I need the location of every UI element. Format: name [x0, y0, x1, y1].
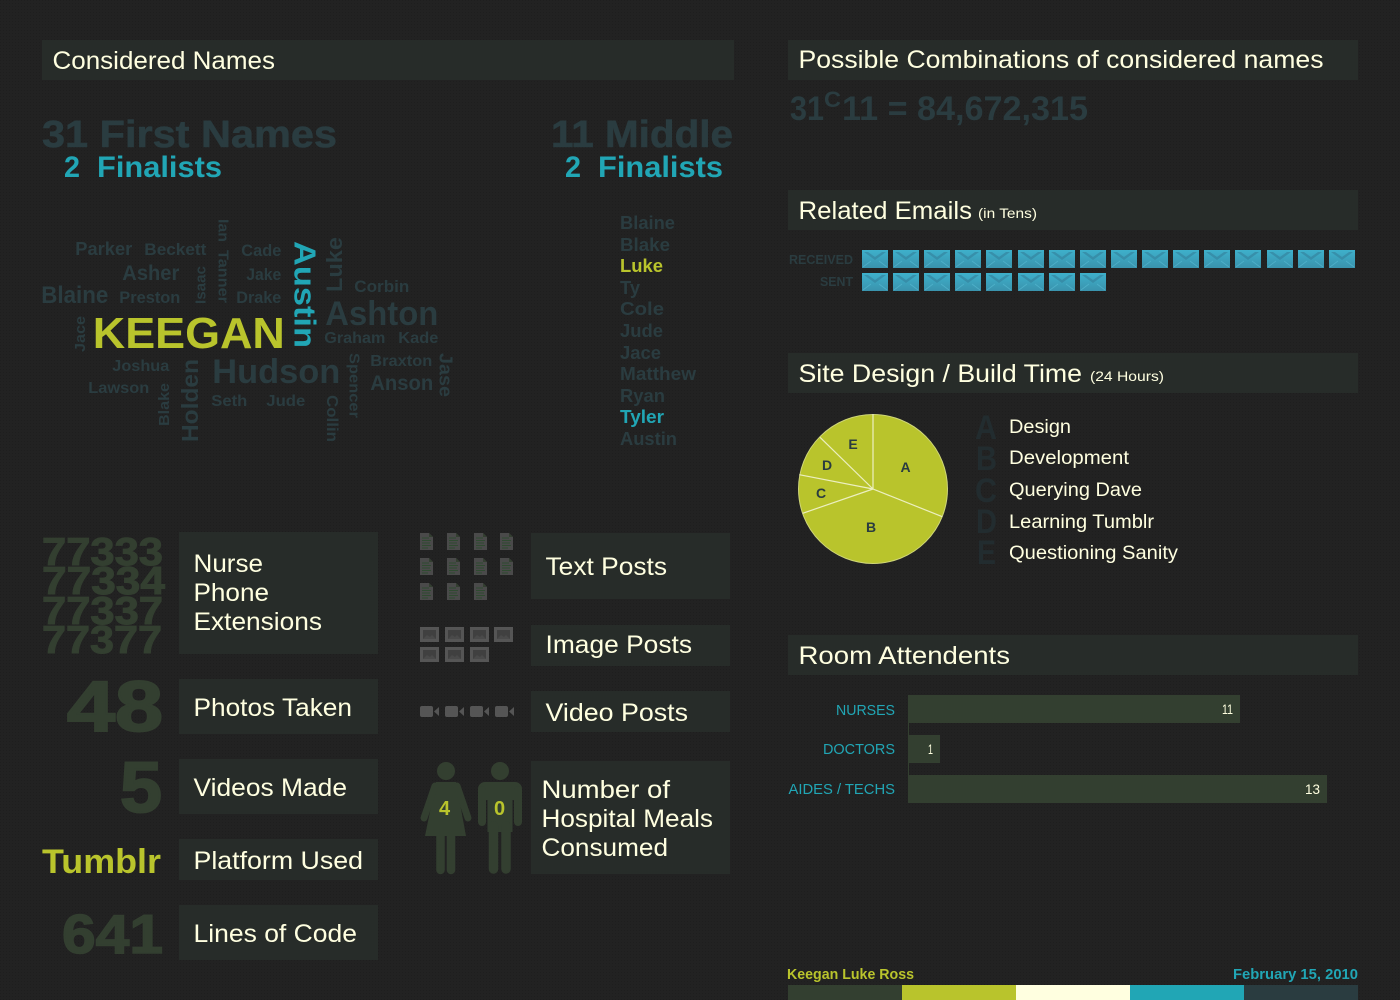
panel: photos taken: 48: [67, 668, 163, 747]
word cloud of first names: Holden: [177, 359, 203, 442]
bar chart: room attendents: 11: [1222, 701, 1233, 717]
panel: related emails heading: [788, 190, 1358, 230]
email chart: SENT: [820, 274, 853, 289]
word cloud of first names: Seth: [211, 393, 247, 410]
word cloud of first names: Kade: [398, 330, 438, 347]
panel: nurse phone extensions: Phone: [194, 579, 269, 607]
heading: 31 first names: 31 First Names: [42, 114, 337, 156]
panel: hospital meals: 0: [494, 798, 505, 820]
word cloud of first names: Collin: [323, 395, 340, 442]
panel: room attendents heading: Room Attendents: [798, 642, 1010, 670]
panel: lines of code: [62, 903, 378, 965]
panel: platform used: Platform Used: [194, 847, 363, 875]
pie chart: [798, 414, 948, 564]
panel: photos taken: [67, 668, 378, 747]
word cloud of first names: Jude: [266, 393, 305, 410]
list of middle names: Jace: [620, 343, 661, 363]
word cloud of first names: Graham: [324, 330, 385, 347]
word cloud of first names: Joshua: [112, 358, 169, 375]
list of middle names: [620, 213, 697, 449]
panel: image posts: [420, 625, 730, 666]
list of middle names: Ryan: [620, 386, 665, 406]
panel: lines of code: Lines of Code: [194, 920, 357, 948]
panel: nurse phone extensions: 77334: [42, 560, 165, 603]
word cloud of first names: Preston: [119, 288, 180, 307]
panel: platform used: Tumblr: [42, 843, 161, 881]
pie chart: D: [822, 457, 832, 473]
panel: platform used: [42, 839, 378, 881]
heading: middle name finalists: Finalists: [598, 151, 723, 184]
heading: middle name finalists: 2: [565, 151, 581, 184]
panel: nurse phone extensions: Extensions: [194, 608, 322, 636]
word cloud of first names: Spencer: [345, 353, 362, 418]
word cloud of first names: Luke: [322, 237, 347, 292]
word cloud of first names: Cade: [241, 241, 281, 260]
list of middle names: Blake: [620, 235, 670, 255]
heading: first name finalists: Finalists: [97, 151, 222, 184]
word cloud of first names: Austin: [287, 241, 322, 348]
panel: image posts: Image Posts: [546, 631, 692, 659]
pie legend: D: [976, 503, 997, 541]
panel: videos made: Videos Made: [194, 774, 347, 802]
word cloud of first names: Ashton: [325, 295, 438, 333]
panel: hospital meals: [424, 761, 730, 874]
combinations formula: 11 = 84,672,315: [842, 90, 1088, 128]
list of middle names: Tyler: [620, 407, 664, 427]
word cloud of first names: Blaine: [41, 282, 108, 309]
word cloud of first names: Lawson: [88, 380, 149, 397]
panel: photos taken: Photos Taken: [194, 694, 352, 722]
panel: nurse phone extensions: 77333: [42, 531, 163, 574]
footer: author: Keegan Luke Ross: [787, 966, 914, 983]
pie legend: E: [977, 534, 996, 572]
email chart: RECEIVED: [789, 252, 853, 267]
pie legend: B: [976, 440, 997, 478]
word cloud of first names: Tanner: [214, 250, 231, 303]
footer: date: February 15, 2010: [1233, 966, 1358, 983]
panel: possible combinations heading: Possible Combinations of considered names: [798, 46, 1324, 74]
panel: hospital meals: Number of: [542, 776, 670, 804]
pie legend: Development: [1009, 448, 1130, 469]
list of middle names: Cole: [620, 299, 664, 319]
bar chart: room attendents: AIDES / TECHS: [788, 781, 895, 798]
pie legend: Design: [1009, 417, 1071, 438]
pie legend: Querying Dave: [1009, 480, 1142, 501]
combinations formula: C: [824, 87, 841, 112]
list of middle names: Blaine: [620, 213, 675, 233]
pie legend: Learning Tumblr: [1009, 512, 1155, 533]
word cloud of first names: Anson: [370, 372, 433, 395]
word cloud of first names: KEEGAN: [93, 309, 285, 358]
word cloud of first names: Ian: [214, 219, 231, 242]
word cloud of first names: Jase: [435, 353, 455, 397]
list of middle names: Matthew: [620, 364, 697, 384]
panel: hospital meals: 4: [439, 798, 451, 820]
panel: site design heading: [788, 353, 1358, 393]
panel: room attendents heading: [788, 635, 1358, 675]
panel: nurse phone extensions: 77337: [42, 590, 163, 633]
heading: 11 middle: 11 Middle: [551, 114, 733, 156]
panel: nurse phone extensions: [42, 531, 378, 662]
word cloud of first names: Beckett: [144, 240, 207, 259]
pie chart: B: [866, 519, 876, 535]
panel: lines of code: 641: [62, 903, 163, 965]
word cloud of first names: Braxton: [370, 353, 432, 370]
word cloud of first names: Asher: [122, 262, 179, 285]
panel: hospital meals: Consumed: [542, 834, 668, 862]
pie legend: A: [975, 409, 997, 447]
word cloud of first names: Hudson: [212, 353, 340, 391]
panel: possible combinations heading: [788, 40, 1358, 80]
panel: considered names heading: Considered Names: [52, 47, 275, 75]
footer: colour strip: [788, 985, 1358, 1000]
word cloud of first names: Jace: [72, 316, 89, 352]
panel: related emails heading: (in Tens): [978, 205, 1037, 221]
pie legend: [975, 409, 1179, 572]
word cloud of first names: Drake: [236, 288, 281, 307]
panel: hospital meals: Hospital Meals: [542, 805, 713, 833]
panel: text posts: [420, 533, 730, 600]
pie legend: Questioning Sanity: [1009, 543, 1179, 564]
panel: videos made: [120, 749, 378, 828]
panel: videos made: 5: [120, 749, 162, 828]
bar chart: room attendents: 1: [928, 741, 933, 757]
word cloud of first names: Blake: [156, 383, 173, 426]
pie chart: E: [848, 436, 858, 452]
panel: considered names heading: [42, 40, 734, 80]
bar chart: room attendents: DOCTORS: [823, 741, 895, 758]
word cloud of first names: Parker: [75, 239, 132, 259]
bar chart: room attendents: 13: [1305, 781, 1320, 797]
word cloud of first names: [41, 219, 455, 442]
list of middle names: Austin: [620, 429, 677, 449]
panel: video posts: Video Posts: [546, 699, 688, 727]
word cloud of first names: Jake: [246, 265, 281, 284]
word cloud of first names: Corbin: [354, 277, 409, 296]
word cloud of first names: Isaac: [193, 266, 210, 304]
combinations formula: 31: [790, 90, 824, 128]
heading: first name finalists: 2: [64, 151, 80, 184]
panel: site design heading: (24 Hours): [1090, 368, 1164, 384]
panel: nurse phone extensions: Nurse: [194, 550, 263, 578]
email chart: [789, 250, 1355, 291]
panel: site design heading: Site Design / Build Time: [798, 360, 1082, 388]
pie chart: A: [900, 459, 911, 475]
panel: nurse phone extensions: 77377: [42, 619, 162, 662]
bar chart: room attendents: [788, 695, 1327, 803]
panel: text posts: Text Posts: [546, 553, 667, 581]
panel: video posts: [420, 691, 730, 732]
pie legend: C: [975, 472, 997, 510]
list of middle names: Ty: [620, 278, 640, 298]
list of middle names: Luke: [620, 256, 663, 276]
panel: related emails heading: Related Emails: [798, 197, 972, 225]
list of middle names: Jude: [620, 321, 663, 341]
bar chart: room attendents: NURSES: [836, 702, 895, 719]
pie chart: C: [816, 485, 826, 501]
